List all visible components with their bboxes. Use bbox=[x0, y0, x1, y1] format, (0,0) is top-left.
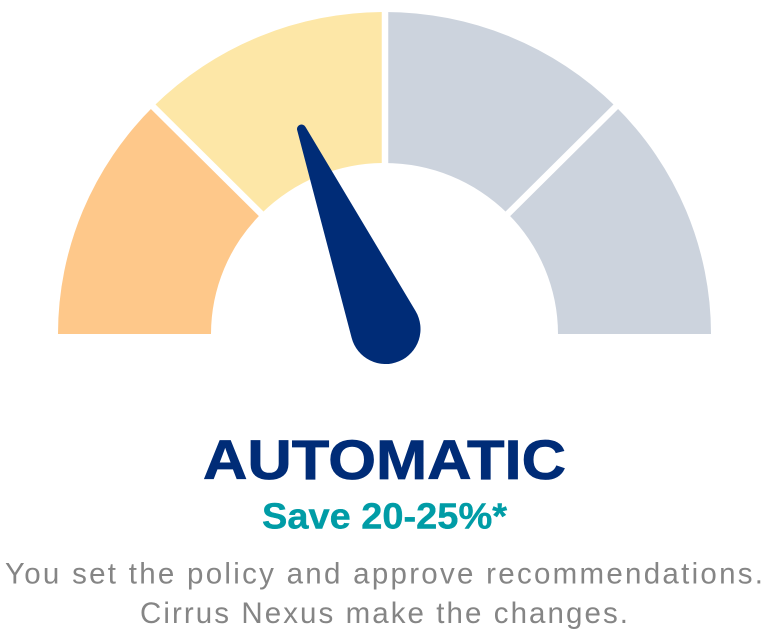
subtitle: savings: Save 20-25%* bbox=[262, 496, 507, 536]
segment: orange bbox=[58, 106, 262, 334]
description line 1: You set the policy and approve recommendations. bbox=[5, 558, 763, 590]
segment: grey lower bbox=[507, 106, 711, 334]
segment: yellow bbox=[154, 12, 384, 213]
gauge needle bbox=[297, 125, 421, 364]
description line 2: Cirrus Nexus make the changes. bbox=[140, 597, 628, 630]
description bbox=[5, 558, 763, 630]
title: AUTOMATIC bbox=[203, 428, 566, 491]
gauge dial bbox=[58, 0, 711, 334]
segment: grey upper bbox=[384, 12, 615, 213]
